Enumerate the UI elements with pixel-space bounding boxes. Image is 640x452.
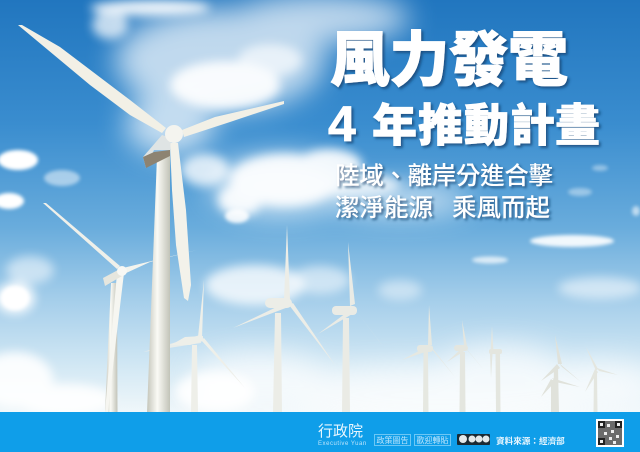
blade down	[170, 143, 191, 301]
turbine far right	[585, 347, 618, 412]
turbine 8	[489, 326, 502, 412]
title: line 1: 風力發電	[330, 27, 568, 94]
title: line 2: 推	[418, 100, 463, 151]
turbine rear pair	[541, 335, 581, 412]
icon: creative commons	[457, 434, 490, 445]
title: line 2: 計	[510, 100, 555, 151]
subtitle: line 1: 陸域、離岸分進合擊	[335, 162, 553, 190]
turbine 5	[318, 242, 388, 412]
tower	[147, 156, 170, 413]
logo: Executive Yuan: 行政院	[318, 422, 363, 440]
subtitle: line 2: 潔淨能源	[335, 194, 433, 222]
title: line 2: 畫	[555, 100, 600, 151]
logo: Executive Yuan: Executive Yuan	[318, 441, 367, 447]
source text: 資料來源：經濟部	[496, 435, 565, 446]
QR code	[596, 419, 624, 447]
wind turbines, distant	[143, 225, 618, 412]
turbine 1, foreground	[18, 25, 284, 413]
blade right	[182, 101, 284, 137]
logo: Executive Yuan	[318, 422, 367, 447]
footer bar	[0, 412, 640, 452]
subtitle: line 2: 乘風而起	[452, 194, 550, 222]
turbine 7	[447, 320, 484, 412]
title: line 2: 動	[464, 100, 509, 151]
title: line 2: 年	[372, 100, 417, 151]
blade upper left	[18, 25, 166, 133]
hub	[165, 125, 183, 143]
title: line 2: 4	[328, 96, 356, 152]
nacelle	[143, 135, 171, 168]
turbine 6	[402, 305, 455, 412]
turbine 2	[43, 203, 197, 412]
turbine 4	[233, 225, 335, 412]
badge: repost: 歡迎轉貼	[416, 435, 448, 445]
badge: policy: 政策圖告	[376, 435, 408, 445]
turbine 3	[143, 280, 245, 412]
